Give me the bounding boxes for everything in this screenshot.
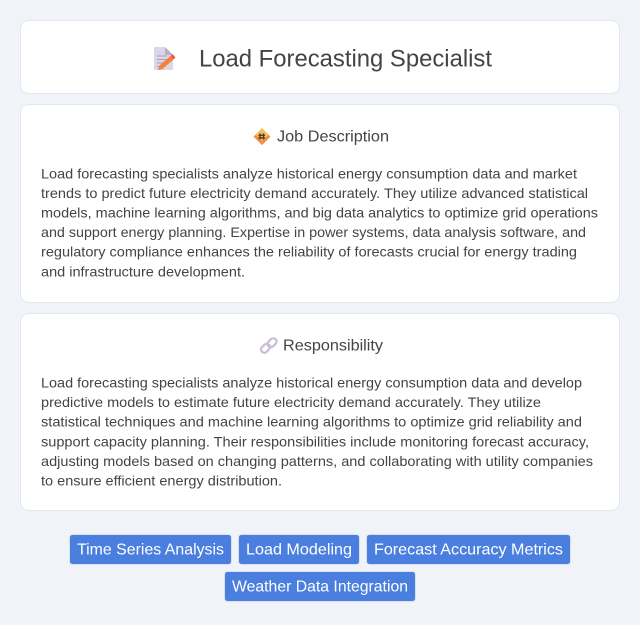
tag: load modeling — [238, 534, 360, 564]
icon: orange diamond sign — [254, 128, 270, 145]
text block: job description — [41, 165, 598, 279]
text block: job description: regulatory compliance enhances the reliability of forecasts crucial for energy trading — [41, 244, 577, 260]
icon: chain link — [260, 337, 278, 354]
text block: job description: and infrastructure development. — [41, 263, 245, 279]
heading: job description: Job Description — [277, 128, 389, 146]
icon: document with pencil — [154, 47, 176, 70]
text block: responsibility: Load forecasting specialists analyze historical energy consumption data and develop — [41, 374, 582, 390]
text block: job description: trends to predict future electricity demand accurately. They utilize advanced statistical — [41, 185, 588, 201]
text block: job description: models, machine learning algorithms, and big data analytics to optimize grid operations — [41, 204, 598, 220]
text block: job description: and support energy planning. Expertise in power systems, data analysis software, and — [41, 224, 586, 240]
tag: time series analysis: Time Series Analysis — [77, 542, 224, 559]
tag row — [70, 534, 570, 602]
panel: title card — [20, 20, 620, 94]
tag: weather data integration — [224, 572, 416, 602]
panel: job description — [20, 104, 620, 302]
tag: time series analysis — [70, 534, 232, 564]
text block: responsibility: predictive models to estimate future electricity demand accurately. They utilize — [41, 394, 541, 410]
text block: responsibility — [41, 374, 593, 488]
heading: responsibility: Responsibility — [283, 338, 383, 354]
text block: responsibility: support capacity planning. Their responsibilities include monitoring forecast accuracy, — [41, 433, 589, 449]
tag: load modeling: Load Modeling — [246, 542, 352, 559]
tag: forecast accuracy metrics: Forecast Accuracy Metrics — [374, 542, 563, 559]
tag: weather data integration: Weather Data Integration — [232, 579, 408, 596]
text block: responsibility: to ensure efficient energy distribution. — [41, 472, 282, 488]
text block: responsibility: statistical techniques and machine learning algorithms to optimize grid reliability and — [41, 414, 582, 430]
panel: responsibility — [20, 314, 620, 510]
title: Load Forecasting Specialist — [199, 46, 492, 72]
text block: responsibility: adjusting models based on changing patterns, and collaborating with utility companies — [41, 453, 593, 469]
tag: forecast accuracy metrics — [366, 534, 570, 564]
text block: job description: Load forecasting specialists analyze historical energy consumption data and market — [41, 165, 577, 181]
